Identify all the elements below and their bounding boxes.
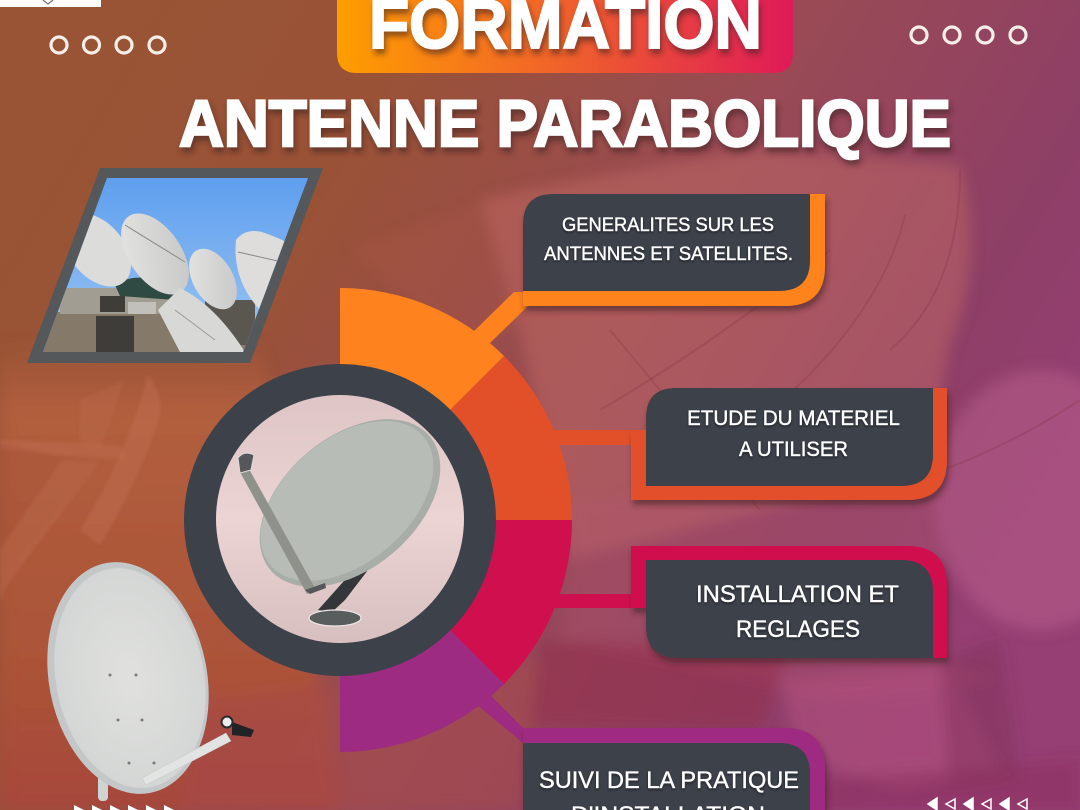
segment crimson xyxy=(340,520,572,684)
decorative circles right xyxy=(911,27,1026,43)
card 3: installation xyxy=(631,546,947,658)
segment purple xyxy=(340,520,504,752)
decorative triangles bottom-right xyxy=(928,798,1027,810)
card 3: installation: INSTALLATION ET xyxy=(696,581,899,608)
subtitle: ANTENNE PARABOLIQUE xyxy=(179,86,951,160)
segmented semicircle xyxy=(340,288,572,752)
top-left white tab xyxy=(0,0,101,7)
photo: satellite dishes xyxy=(27,168,323,363)
card 2: etude du materiel xyxy=(631,388,947,500)
card 1: generalites: GENERALITES SUR LES xyxy=(562,214,774,236)
title pill xyxy=(337,0,793,73)
card 1: generalites: ANTENNES ET SATELLITES. xyxy=(544,243,793,265)
card 4: suivi xyxy=(523,728,825,810)
segment red-orange xyxy=(340,356,572,520)
icon: bottom-left dish xyxy=(28,548,254,808)
centre disc xyxy=(184,364,496,676)
card 2: etude du materiel: ETUDE DU MATERIEL xyxy=(687,407,900,430)
connector lines xyxy=(470,292,646,743)
card 1: generalites xyxy=(523,194,825,306)
decorative circles left xyxy=(51,37,165,53)
icon: centre dish xyxy=(228,386,472,626)
card 2: etude du materiel: A UTILISER xyxy=(739,438,848,461)
card 4: suivi: SUIVI DE LA PRATIQUE xyxy=(539,767,799,794)
segment orange xyxy=(340,288,504,520)
decorative triangles bottom-left xyxy=(74,805,174,810)
card 3: installation: REGLAGES xyxy=(736,616,860,643)
